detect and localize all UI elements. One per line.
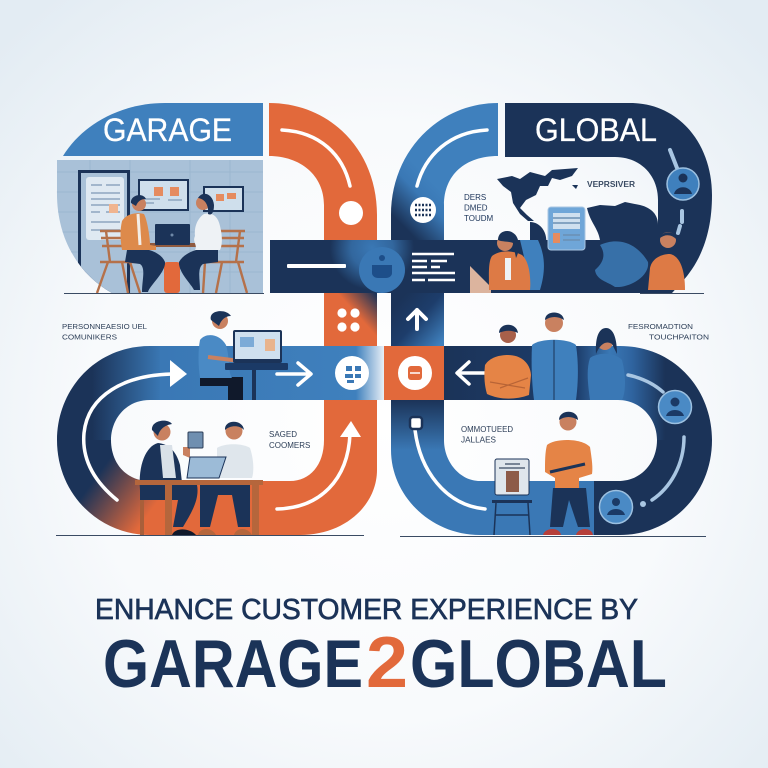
label: touchpoint: FESROMADTION — [628, 322, 693, 331]
icon: profile badge — [667, 168, 699, 200]
curved arrow orange — [277, 434, 350, 509]
arrow right — [277, 363, 311, 385]
track: blue curve to global — [391, 103, 498, 240]
title line: ENHANCE CUSTOMER EXPERIENCE BY — [95, 594, 638, 626]
illustration: garage meeting room — [56, 160, 264, 294]
column: blue connector — [391, 293, 444, 346]
icon: network node — [410, 197, 436, 223]
figure: man in orange — [120, 195, 165, 292]
column: orange connector — [324, 293, 377, 346]
white curved stroke — [282, 130, 350, 186]
figure: presenter in orange — [648, 232, 685, 290]
dash — [287, 264, 346, 268]
figure: woman in white — [179, 194, 222, 290]
arrow left — [457, 362, 484, 384]
icon: orange node square — [384, 346, 444, 400]
label: personalised: PERSONNEAESIO UEL — [62, 322, 147, 331]
title: garage2global: GARAGE — [103, 626, 363, 702]
arrowhead up — [340, 421, 361, 437]
title: garage2global: GLOBAL — [410, 626, 667, 702]
label: personalised: COMUNIKERS — [62, 332, 117, 342]
baseline — [400, 536, 706, 537]
track: orange curve from garage — [269, 103, 377, 240]
icon: laptop — [155, 224, 190, 245]
icon: orange stool — [164, 262, 180, 293]
icon: hub badge — [359, 247, 405, 293]
baseline — [64, 293, 264, 294]
world map — [497, 168, 658, 245]
label: vepr: VEPRSIVER — [587, 180, 635, 189]
figure: person at desk — [198, 311, 288, 400]
text lines icon — [412, 254, 455, 280]
title: garage2global: 2 — [366, 623, 408, 703]
icon: group badge — [335, 356, 369, 390]
heading band: garage — [63, 103, 263, 156]
arrowhead — [170, 360, 187, 387]
figure: standing man — [543, 412, 593, 535]
label: ders: DMED — [464, 204, 488, 212]
dot — [640, 501, 646, 507]
panel: lower right track — [384, 322, 712, 535]
track marks — [628, 375, 684, 500]
curved arrow left — [84, 374, 172, 500]
label: omnichannel: OMMOTUEED — [461, 425, 513, 434]
heading: global: GLOBAL — [535, 112, 657, 148]
label: omnichannel: JALLAES — [461, 436, 496, 444]
label: ders: TOUDM — [464, 214, 494, 223]
baseline — [640, 293, 704, 294]
icon: profile badge right — [658, 390, 692, 424]
label: saged: COOMERS — [269, 441, 310, 450]
panel: lower left track — [57, 346, 388, 535]
icon: small square node — [410, 417, 422, 429]
icon: profile badge bottom — [600, 490, 632, 524]
kiosk tablet — [492, 459, 532, 535]
dashed track marks — [670, 150, 682, 233]
label: touchpoint: TOUCHPAITON — [649, 332, 709, 342]
icon: survey tablet — [548, 207, 585, 250]
node circle — [339, 201, 363, 225]
illustration: chairs and table — [97, 231, 247, 293]
label: saged: SAGED — [269, 430, 297, 439]
figures: three people — [484, 312, 625, 400]
arrow up — [408, 310, 426, 329]
map: blue land masses — [520, 240, 648, 290]
panel: global — [464, 103, 712, 294]
label: ders: DERS — [464, 193, 486, 202]
figures: two people at table — [56, 421, 364, 536]
hub bar — [270, 240, 470, 293]
curved white line — [415, 430, 485, 509]
icon: four dots — [337, 308, 360, 332]
heading band: garage: GARAGE — [103, 112, 232, 148]
figure: woman at laptop — [470, 231, 530, 293]
panel: garage — [56, 103, 264, 294]
